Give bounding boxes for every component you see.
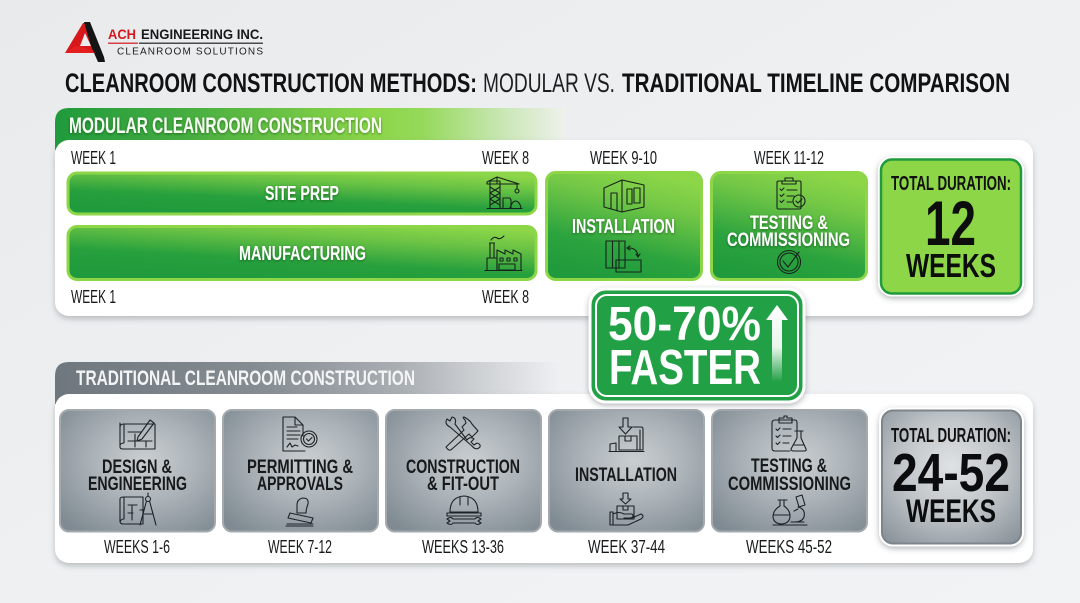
total duration box: modular: WEEKS: [906, 247, 996, 284]
total duration box: traditional: [882, 410, 1021, 544]
card: construction and fit-out: [386, 410, 541, 557]
title: [65, 68, 1010, 98]
total duration box: traditional: 24-52: [892, 443, 1010, 503]
total duration box: traditional: WEEKS: [906, 493, 996, 529]
logo wordmark: [108, 26, 263, 58]
bar: site prep: [68, 173, 536, 214]
card: design and engineering: [60, 410, 215, 557]
bar: manufacturing: MANUFACTURING: [239, 243, 366, 265]
card: permitting and approvals: [223, 410, 378, 557]
card: testing and commissioning: COMMISSIONING: [727, 230, 850, 251]
logo wordmark: ACH: [108, 26, 136, 42]
week label: WEEKS 1-6: [104, 537, 170, 557]
section header: modular: MODULAR CLEANROOM CONSTRUCTION: [69, 113, 382, 138]
week labels: WEEK 11-12: [754, 148, 824, 168]
card: installation: INSTALLATION: [572, 216, 675, 238]
card: testing and commissioning: COMMISSIONING: [728, 474, 851, 495]
panel background: [55, 394, 1033, 563]
card: design and engineering: DESIGN &: [102, 457, 172, 478]
week label: WEEK 7-12: [268, 537, 332, 557]
title: CLEANROOM CONSTRUCTION METHODS:: [65, 68, 477, 98]
card: construction and fit-out: & FIT-OUT: [427, 474, 499, 495]
icon: flask and microscope: [773, 495, 807, 525]
section header: traditional: [55, 362, 560, 404]
icon: signed document with seal: [283, 417, 317, 451]
icon: crossed wrench and hammer: [446, 417, 480, 450]
panel: modular timeline: [55, 140, 1033, 316]
card: installation: [549, 410, 704, 557]
card: construction and fit-out: CONSTRUCTION: [406, 457, 520, 478]
panel background: [55, 140, 1033, 316]
icon: blueprint with pencil: [120, 420, 155, 449]
logo mark: [65, 22, 105, 62]
panel: traditional timeline: [55, 394, 1033, 563]
card: testing and commissioning: TESTING &: [750, 213, 828, 234]
total duration box: traditional: TOTAL DURATION:: [891, 425, 1011, 447]
card: installation: INSTALLATION: [575, 465, 677, 486]
icon: rubber stamp: [286, 498, 313, 526]
icon: factory: [485, 236, 522, 270]
total duration box: modular: [881, 160, 1021, 294]
section header: modular: [55, 108, 565, 150]
week labels: WEEK 1: [71, 148, 116, 168]
total duration box: modular: TOTAL DURATION:: [891, 173, 1011, 195]
week labels: [71, 148, 824, 307]
week label: WEEKS 45-52: [746, 537, 832, 557]
bar: site prep: SITE PREP: [265, 183, 339, 205]
week label: WEEK 37-44: [588, 537, 665, 557]
icon: module lowered by crane: [609, 418, 644, 452]
week label: WEEKS 13-36: [422, 537, 504, 557]
bar: manufacturing: [68, 226, 536, 280]
icon: modular room: [604, 180, 644, 212]
week labels: WEEK 1: [71, 287, 116, 307]
icon: blueprint with compass: [120, 493, 156, 525]
icon: panel placement: [606, 241, 641, 272]
total duration box: modular: 12: [925, 189, 976, 259]
icon: up arrow: [766, 305, 788, 382]
callout badge: 50-70% faster: 50-70%: [608, 298, 761, 351]
icon: hand holding box: [610, 493, 643, 525]
section header: traditional: TRADITIONAL CLEANROOM CONSTRUCTION: [76, 367, 415, 390]
icon: check circle: [778, 250, 800, 274]
card: testing and commissioning: [712, 172, 866, 280]
logo wordmark: ENGINEERING INC.: [141, 26, 263, 42]
week labels: WEEK 9-10: [590, 148, 657, 168]
icon: hard hat and wrench: [447, 496, 481, 524]
card: testing and commissioning: [712, 410, 867, 557]
callout badge: 50-70% faster: FASTER: [609, 341, 761, 395]
icon: clipboard check: [777, 178, 805, 209]
icon: crane: [487, 177, 522, 208]
icon: clipboard and flask: [772, 416, 806, 451]
callout badge: 50-70% faster: [590, 289, 804, 402]
card: design and engineering: ENGINEERING: [88, 474, 187, 495]
card: testing and commissioning: TESTING &: [751, 456, 827, 477]
week labels: WEEK 8: [482, 148, 529, 168]
title: MODULAR VS.: [483, 68, 615, 98]
week labels: WEEK 8: [482, 287, 529, 307]
card: permitting and approvals: APPROVALS: [257, 474, 343, 495]
logo: ACH Engineering Inc.: [65, 22, 263, 62]
logo wordmark: CLEANROOM SOLUTIONS: [117, 46, 263, 58]
card: permitting and approvals: PERMITTING &: [247, 457, 353, 478]
card: installation: [546, 172, 702, 280]
